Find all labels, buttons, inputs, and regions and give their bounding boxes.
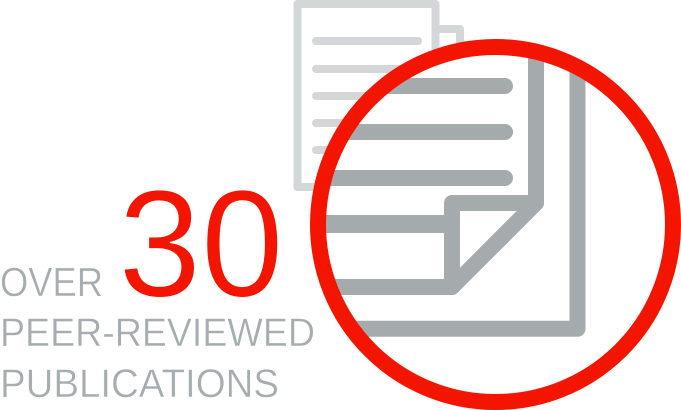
text: publications: PUBLICATIONS <box>0 362 279 406</box>
icon: red circle <box>318 47 673 402</box>
text: over: OVER <box>0 259 103 305</box>
icon: large document inside magnifying circle <box>326 58 586 337</box>
text: peer-reviewed: PEER-REVIEWED <box>0 311 315 355</box>
icon: light background document <box>298 4 460 187</box>
number: 30: 30 <box>118 159 284 329</box>
